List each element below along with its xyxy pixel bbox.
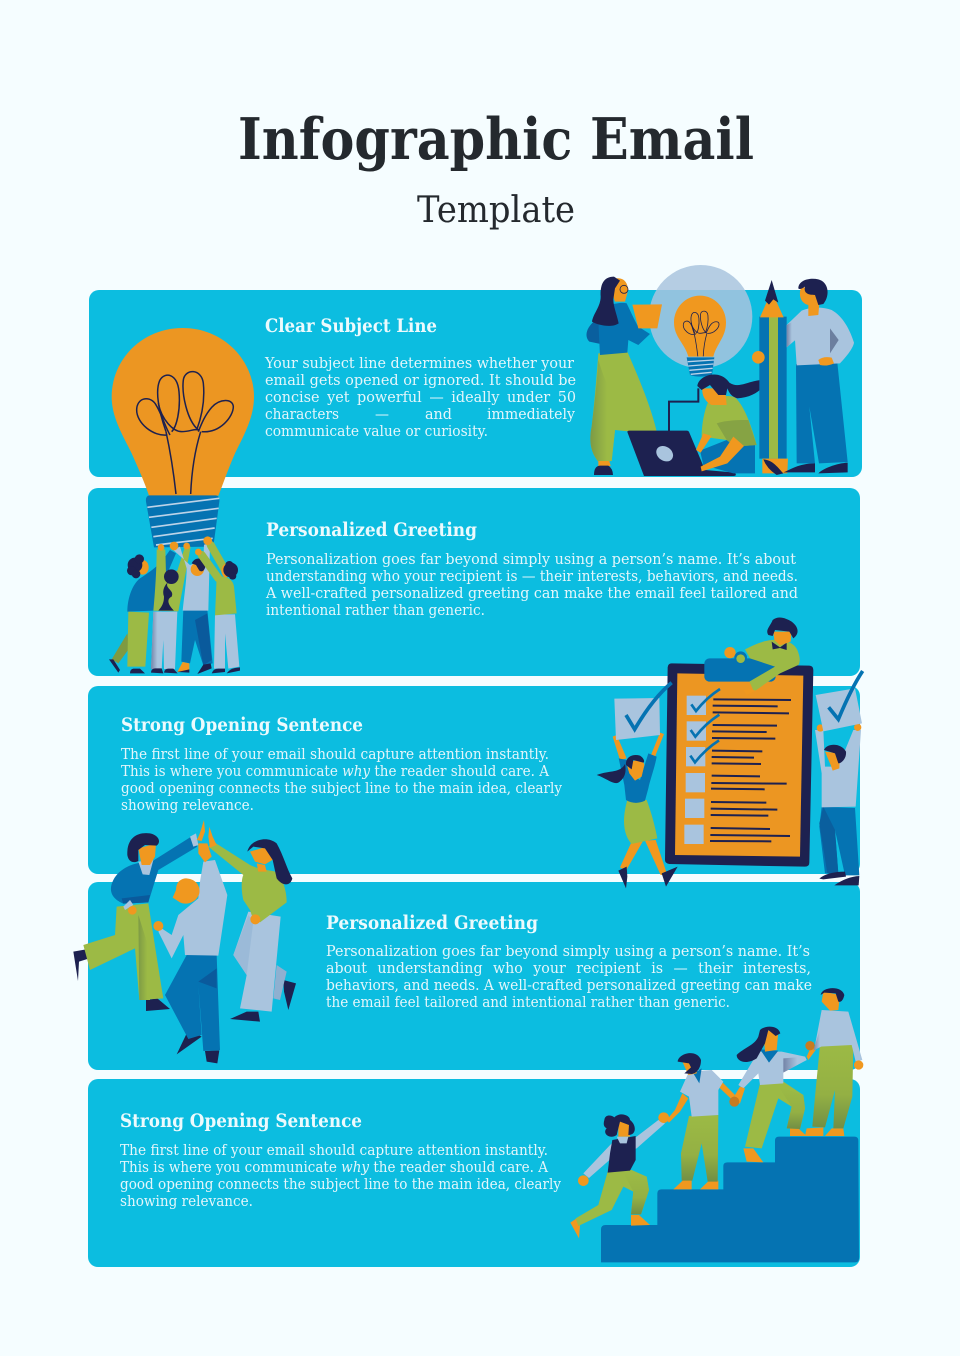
- figure: woman holding check card: [597, 733, 678, 888]
- text block: subject line body: characters: [265, 407, 339, 423]
- text block: subject line body: Your subject line determines whether your: [264, 356, 574, 372]
- illustration: team with small light bulb and pencil: [586, 265, 854, 476]
- figure: woman jumping right: [208, 827, 296, 1022]
- text block: greeting body: Personalization goes far beyond simply using a person’s name. It’s about: [266, 552, 796, 568]
- icon: check card left: [614, 683, 672, 740]
- text block: opening body: This is where you communicate why the reader should care. A: [120, 1160, 548, 1176]
- icon: big bulb: [112, 328, 254, 496]
- text block: greeting body: [326, 944, 812, 1011]
- text block: opening body: [120, 1143, 562, 1210]
- heading: strong opening sentence: Strong Opening Sentence: [120, 1110, 362, 1132]
- panel: personalized greeting one: [88, 488, 860, 676]
- icon: lifting hands: [158, 536, 212, 555]
- heading: strong opening sentence: Strong Opening Sentence: [121, 714, 363, 736]
- text block: greeting body: Personalization goes far beyond simply using a person’s name. It’s: [326, 944, 810, 960]
- figure: back lifter with ponytail: [151, 547, 191, 673]
- text block: subject line body: and: [425, 407, 452, 423]
- panel: strong opening sentence one: [88, 686, 860, 874]
- illustration: big light bulb lifted by team: [109, 328, 254, 674]
- text block: greeting body: behaviors, and needs. A well-crafted personalized greeting can make: [326, 978, 812, 994]
- figure: climber two: [667, 1053, 735, 1189]
- figure: climber three: [729, 1027, 816, 1162]
- text block: opening body: The first line of your email should capture attention instantly.: [121, 747, 549, 763]
- illustration: checklist clipboard team: [597, 617, 863, 888]
- text block: opening body: [121, 747, 563, 814]
- text block: greeting body: about understanding who your recipient is — their interests,: [326, 961, 811, 977]
- figure: centre lifter: [173, 544, 213, 674]
- text block: opening body: showing relevance.: [120, 1194, 253, 1210]
- panel: strong opening sentence two: [88, 1079, 860, 1267]
- text block: greeting body: the email feel tailored and intentional rather than generic.: [326, 995, 730, 1011]
- title: Infographic Email: [238, 106, 754, 173]
- figure: climber one: [570, 1112, 669, 1238]
- panel: personalized greeting two: [88, 882, 860, 1070]
- text block: greeting body: A well-crafted personalized greeting can make the email feel tailored and: [265, 586, 798, 602]
- figure: right lifter: [202, 545, 240, 673]
- icon: small bulb: [674, 296, 726, 377]
- figure: standing woman: [586, 277, 662, 475]
- panel: clear subject line: [89, 290, 862, 477]
- text block: subject line body: —: [375, 407, 389, 423]
- icon: clipboard: [665, 658, 813, 867]
- figure: seated woman: [696, 374, 769, 473]
- icon: bulb base: [146, 495, 219, 547]
- text block: opening body: good opening connects the subject line to the main idea, clearly: [121, 781, 563, 797]
- text block: greeting body: intentional rather than generic.: [266, 603, 485, 619]
- text block: opening body: showing relevance.: [121, 798, 254, 814]
- figure: left lifter: [109, 550, 176, 673]
- icon: staircase: [601, 1137, 859, 1262]
- text block: greeting body: understanding who your recipient is — their interests, behaviors, and needs.: [266, 569, 798, 585]
- illustration: three people high five: [73, 820, 296, 1063]
- heading: personalized greeting: Personalized Greeting: [266, 519, 477, 541]
- icon: check card right: [816, 671, 863, 731]
- subtitle: Template: [417, 190, 575, 231]
- text block: greeting body: [265, 552, 798, 619]
- text block: opening body: good opening connects the subject line to the main idea, clearly: [120, 1177, 562, 1193]
- text block: subject line body: concise yet powerful — ideally under 50: [265, 390, 576, 406]
- heading: clear subject line: Clear Subject Line: [265, 315, 437, 337]
- figure: man leaning over clipboard: [724, 617, 800, 695]
- figure: man holding check card: [815, 724, 861, 885]
- figure: standing man: [763, 279, 854, 475]
- text block: subject line body: [264, 356, 576, 440]
- icon: laptop and cable: [627, 388, 736, 476]
- checklist rows: [684, 689, 791, 844]
- text block: opening body: The first line of your email should capture attention instantly.: [120, 1143, 548, 1159]
- figure: man centre: [153, 843, 227, 1063]
- text block: subject line body: immediately: [487, 407, 576, 423]
- illustration: team climbing stairs: [570, 988, 863, 1262]
- icon: giant pencil: [752, 280, 788, 473]
- figure: climber four: [805, 988, 863, 1136]
- text block: subject line body: communicate value or curiosity.: [265, 424, 488, 440]
- figure: woman jumping left: [73, 820, 205, 1011]
- text block: opening body: This is where you communicate why the reader should care. A: [121, 764, 549, 780]
- text block: subject line body: email gets opened or ignored. It should be: [265, 373, 576, 389]
- heading: personalized greeting: Personalized Greeting: [326, 912, 538, 934]
